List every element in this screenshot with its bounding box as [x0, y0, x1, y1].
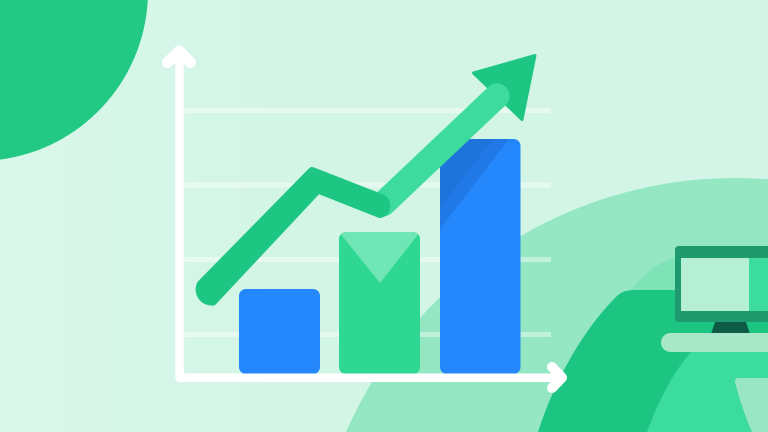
- pale hill highlight: [630, 257, 700, 292]
- pale chair shape: [735, 378, 768, 432]
- lower trend segment: [200, 171, 386, 302]
- desk top: [661, 333, 768, 352]
- bar: medium green: [339, 232, 420, 374]
- large pale hill: [346, 178, 768, 432]
- corner circle: [0, 0, 148, 160]
- trend arrow: [200, 56, 535, 302]
- bright green mound: [647, 352, 768, 432]
- chart axes: [168, 51, 562, 388]
- monitor screen: [681, 258, 749, 311]
- horizontal grid lines: [183, 110, 551, 334]
- dark green hill: [538, 290, 768, 432]
- monitor stand: [711, 322, 750, 334]
- bar: short blue: [239, 289, 320, 374]
- monitor side panel: [749, 258, 768, 311]
- monitor frame: [675, 246, 768, 322]
- arrowhead: [474, 56, 535, 120]
- bar: tall blue: [440, 139, 521, 374]
- desk scene: [538, 246, 768, 432]
- rising arrow shaft: [383, 96, 497, 204]
